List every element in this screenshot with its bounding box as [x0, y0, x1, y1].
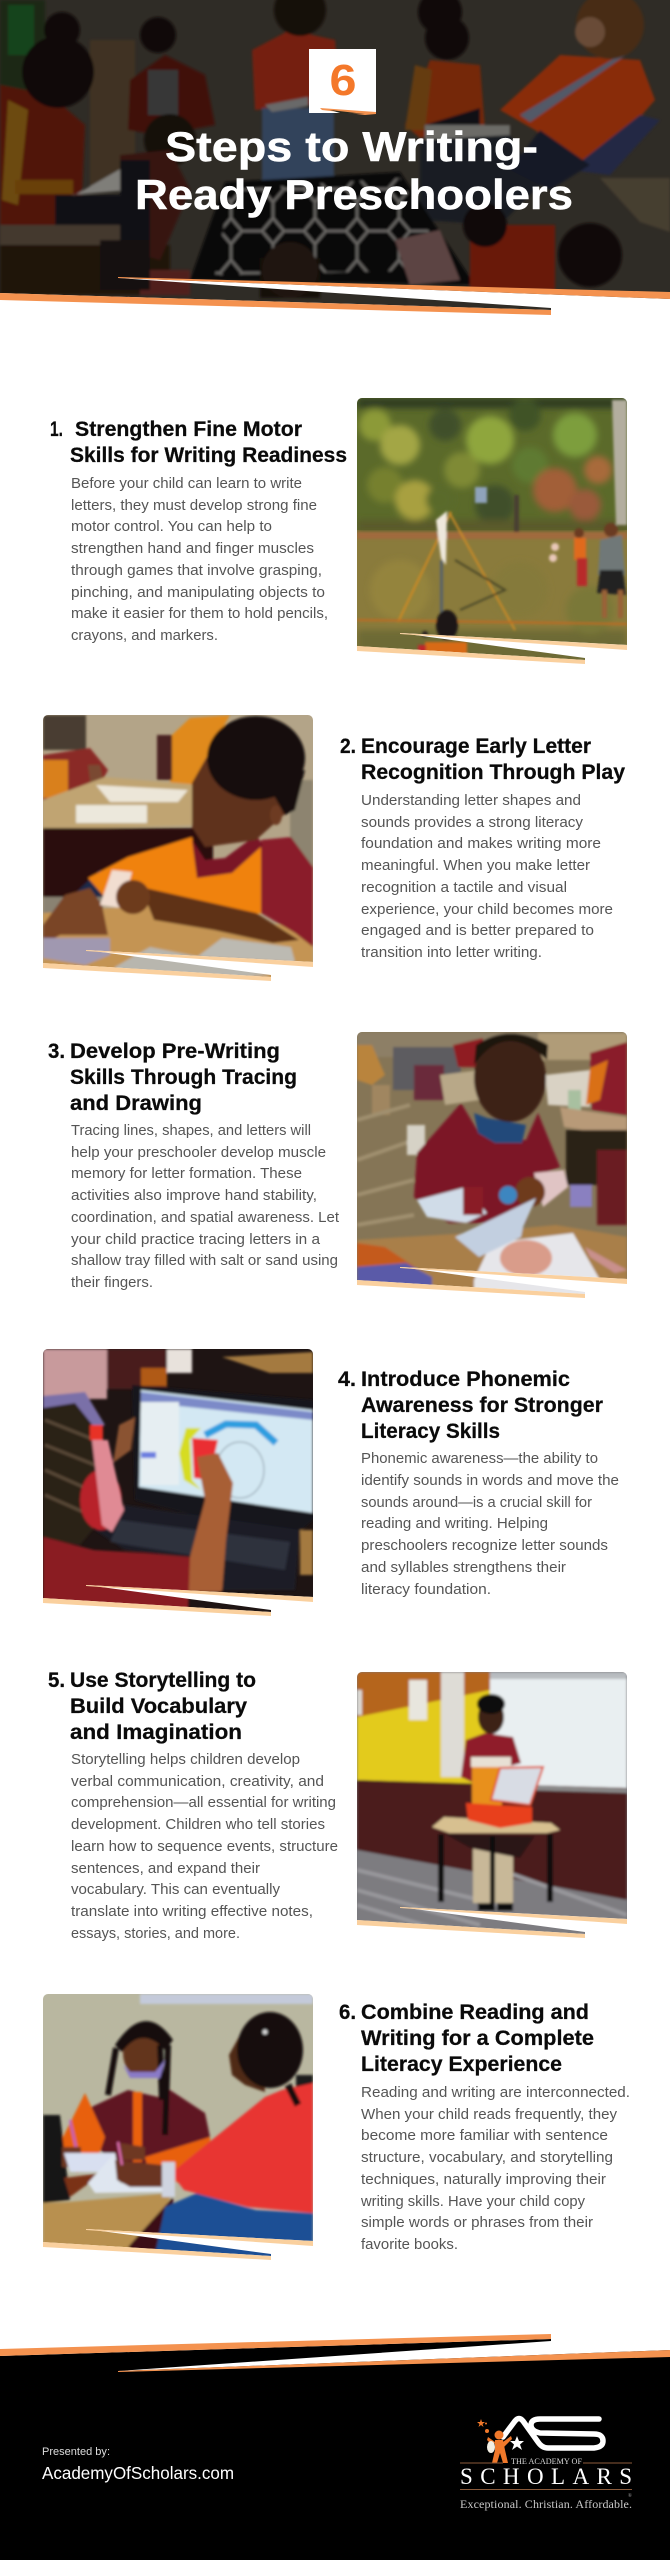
text: step 1 body: crayons, and markers. — [71, 628, 218, 644]
text: step 4 body: preschoolers recognize letter sounds — [361, 1538, 608, 1554]
photo: boy cutting paper — [356, 1032, 628, 1309]
heading: step 5: Use Storytelling to — [70, 1669, 256, 1692]
text: step 5 body: Storytelling helps children develop — [71, 1752, 300, 1768]
text: step 2 body: foundation and makes writing more — [361, 836, 601, 852]
panel: step 1 — [50, 398, 628, 675]
photo: child on laptop — [42, 1349, 314, 1627]
heading: step 4: Awareness for Stronger — [361, 1394, 603, 1417]
heading: step 1 — [50, 418, 347, 467]
panel: step 4 — [42, 1349, 619, 1627]
presented by: AcademyOfScholars.com — [42, 2463, 234, 2483]
heading: step 6: Literacy Experience — [361, 2053, 562, 2076]
heading: step 2: Recognition Through Play — [361, 761, 625, 784]
text: step 2 body — [361, 793, 613, 961]
text: step 1 body: pinching, and manipulating objects to — [71, 585, 325, 601]
text: step 6 body: become more familiar with sentence — [361, 2128, 608, 2144]
heading: step 2: 2. — [340, 735, 356, 758]
logo: The Academy of Scholars — [460, 2418, 632, 2511]
text: step 2 body: recognition a tactile and visual — [361, 880, 567, 896]
text: step 4 body: Phonemic awareness—the ability to — [361, 1451, 598, 1467]
heading: step 5: Build Vocabulary — [70, 1695, 247, 1718]
text: step 5 body: vocabulary. This can eventually — [71, 1882, 281, 1898]
text: step 6 body: techniques, naturally improving their — [361, 2172, 606, 2188]
panel: step 6 — [42, 1994, 630, 2271]
text: step 5 body: verbal communication, creativity, and — [71, 1774, 324, 1790]
text: step 2 body: meaningful. When you make letter — [361, 858, 590, 874]
text: step 6 body: simple words or phrases from their — [361, 2215, 593, 2231]
footer swoosh — [0, 2304, 670, 2372]
text: step 5 body — [71, 1752, 338, 1942]
text: step 2 body: experience, your child becomes more — [361, 902, 613, 918]
text: step 3 body: your child practice tracing letters in a — [71, 1232, 321, 1248]
text: step 1 body: make it easier for them to hold pencils, — [71, 606, 328, 622]
panel: step 2 — [42, 715, 625, 992]
text: step 6 body: When your child reads frequently, they — [361, 2107, 618, 2123]
heading: step 4: 4. — [338, 1368, 356, 1391]
text: step 2 body: sounds provides a strong literacy — [361, 815, 584, 831]
text: step 1 body: strengthen hand and finger muscles — [71, 541, 314, 557]
text: step 3 body: activities also improve hand stability, — [71, 1188, 317, 1204]
logo text: Exceptional. Christian. Affordable. — [460, 2497, 632, 2511]
text: step 4 body — [361, 1451, 619, 1598]
heading: step 3: and Drawing — [70, 1092, 202, 1115]
text: step 4 body: identify sounds in words and move the — [361, 1473, 619, 1489]
text: step 3 body: shallow tray filled with salt or sand using — [71, 1253, 338, 1269]
heading: step 3: Skills Through Tracing — [70, 1066, 297, 1089]
text: step 1 body: Before your child can learn to write — [71, 476, 302, 492]
icon: white wing — [487, 2441, 495, 2453]
icon: orange child — [477, 2419, 512, 2463]
heading: step 3: Develop Pre-Writing — [70, 1040, 280, 1063]
text: step 5 body: comprehension—all essential for writing — [71, 1795, 336, 1811]
panel: step 3 — [48, 1032, 628, 1309]
heading: step 6 — [339, 2001, 594, 2076]
heading: step 1: Strengthen Fine Motor — [75, 418, 302, 441]
text: step 1 body: letters, they must develop strong fine — [71, 498, 317, 514]
text: step 6 body — [360, 2085, 630, 2253]
footer background — [0, 2330, 670, 2560]
logo text: SCHOLARS — [460, 2464, 632, 2489]
heading: step 3: 3. — [48, 1040, 65, 1063]
header swoosh — [0, 277, 670, 345]
heading: step 6: 6. — [339, 2001, 356, 2024]
header banner — [0, 0, 670, 345]
text: step 5 body: translate into writing effective notes, — [71, 1904, 313, 1920]
photo: children playing on field — [356, 398, 628, 675]
heading: step 4 — [338, 1368, 603, 1443]
text: step 2 body: transition into letter writing. — [361, 945, 542, 961]
text: step 6 body: writing skills. Have your child copy — [360, 2194, 586, 2210]
panel: step 5 — [48, 1669, 628, 1949]
logo text — [460, 2456, 632, 2511]
number badge — [309, 49, 376, 115]
text: step 1 body — [71, 476, 328, 644]
heading: step 1: 1. — [50, 418, 63, 441]
text: step 3 body: Tracing lines, shapes, and letters will — [71, 1123, 311, 1139]
photo: boy presenting at desk — [356, 1672, 628, 1949]
logo text: THE ACADEMY OF — [511, 2456, 582, 2466]
title: Steps to Writing- — [165, 123, 538, 170]
icon: AS monogram — [503, 2418, 603, 2448]
heading: step 2 — [340, 735, 625, 784]
text: step 3 body — [71, 1123, 339, 1291]
heading: step 5: 5. — [48, 1669, 65, 1692]
text: step 6 body: Reading and writing are interconnected. — [361, 2085, 630, 2101]
heading: step 5 — [48, 1669, 256, 1744]
heading: step 3 — [48, 1040, 297, 1115]
photo: boy gluing at desk — [42, 715, 314, 992]
text: step 5 body: development. Children who tell stories — [71, 1817, 325, 1833]
heading: step 5: and Imagination — [70, 1721, 242, 1744]
text: step 4 body: reading and writing. Helping — [361, 1516, 548, 1532]
heading: step 6: Combine Reading and — [361, 2001, 589, 2024]
heading: step 4: Introduce Phonemic — [361, 1368, 570, 1391]
text: step 4 body: literacy foundation. — [361, 1582, 491, 1598]
icon: white star — [510, 2436, 524, 2450]
heading: step 2: Encourage Early Letter — [361, 735, 591, 758]
text: step 1 body: through games that involve grasping, — [71, 563, 322, 579]
text: step 2 body: engaged and is better prepared to — [361, 923, 594, 939]
photo: two girls writing together — [42, 1994, 314, 2271]
text: step 2 body: Understanding letter shapes and — [361, 793, 581, 809]
text: step 3 body: memory for letter formation. These — [71, 1166, 302, 1182]
presented by: Presented by: — [42, 2446, 110, 2458]
presented by — [42, 2446, 234, 2483]
header photo: classroom circle — [0, 0, 670, 330]
text: step 5 body: learn how to sequence events, structure — [71, 1839, 338, 1855]
text: step 5 body: sentences, and expand their — [71, 1861, 260, 1877]
text: step 3 body: their fingers. — [71, 1275, 153, 1291]
text: step 5 body: essays, stories, and more. — [71, 1926, 240, 1942]
text: step 6 body: favorite books. — [361, 2237, 458, 2253]
text: step 3 body: help your preschooler develop muscle — [71, 1145, 326, 1161]
footer — [0, 2304, 670, 2560]
text: step 4 body: and syllables strengthens their — [361, 1560, 566, 1576]
text: step 3 body: coordination, and spatial awareness. Let — [71, 1210, 339, 1226]
heading: step 1: Skills for Writing Readiness — [70, 444, 347, 467]
logo text: ® — [628, 2493, 632, 2499]
title: Ready Preschoolers — [135, 171, 573, 218]
text: step 4 body: sounds around—is a crucial skill for — [361, 1495, 592, 1511]
heading: step 4: Literacy Skills — [361, 1420, 500, 1443]
number badge: 6 — [330, 56, 356, 105]
heading: step 6: Writing for a Complete — [361, 2027, 594, 2050]
title — [135, 123, 573, 218]
text: step 6 body: structure, vocabulary, and storytelling — [361, 2150, 613, 2166]
text: step 1 body: motor control. You can help to — [71, 519, 272, 535]
